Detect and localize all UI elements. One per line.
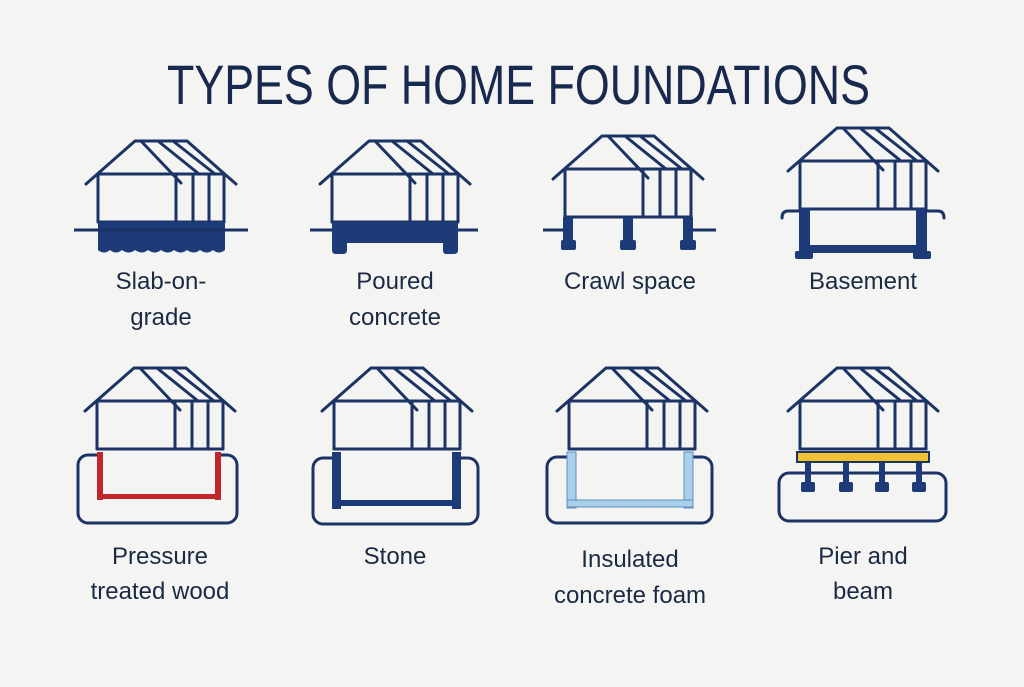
label: concrete (349, 304, 441, 331)
label: treated wood (91, 578, 229, 605)
panel: stone (313, 368, 478, 570)
ICF walls (567, 452, 693, 508)
panel: pier and beam (779, 368, 946, 605)
stone walls (332, 452, 461, 509)
label: Poured (356, 268, 434, 295)
panel: poured concrete (310, 141, 478, 331)
footing (332, 222, 458, 254)
label: Pressure (112, 543, 208, 570)
panel: crawl space (543, 136, 716, 295)
panel: basement (782, 128, 944, 295)
title: TYPES OF HOME FOUNDATIONS (167, 53, 870, 116)
beam (797, 452, 929, 462)
label: beam (833, 578, 893, 605)
piers (801, 463, 926, 492)
label: Basement (809, 268, 917, 295)
label: Insulated (581, 546, 679, 573)
label: Stone (364, 543, 426, 570)
label: Crawl space (564, 268, 696, 295)
red wood frame (97, 452, 221, 500)
slab (98, 222, 225, 252)
basement walls (795, 208, 931, 259)
piers (561, 217, 696, 250)
panel: insulated concrete foam (547, 368, 712, 609)
label: grade (130, 304, 192, 331)
panel: slab-on-grade (74, 141, 248, 331)
label: Pier and (818, 543, 908, 570)
label: Slab-on- (116, 268, 206, 295)
label: concrete foam (554, 582, 706, 609)
panel: pressure treated wood (78, 368, 237, 605)
